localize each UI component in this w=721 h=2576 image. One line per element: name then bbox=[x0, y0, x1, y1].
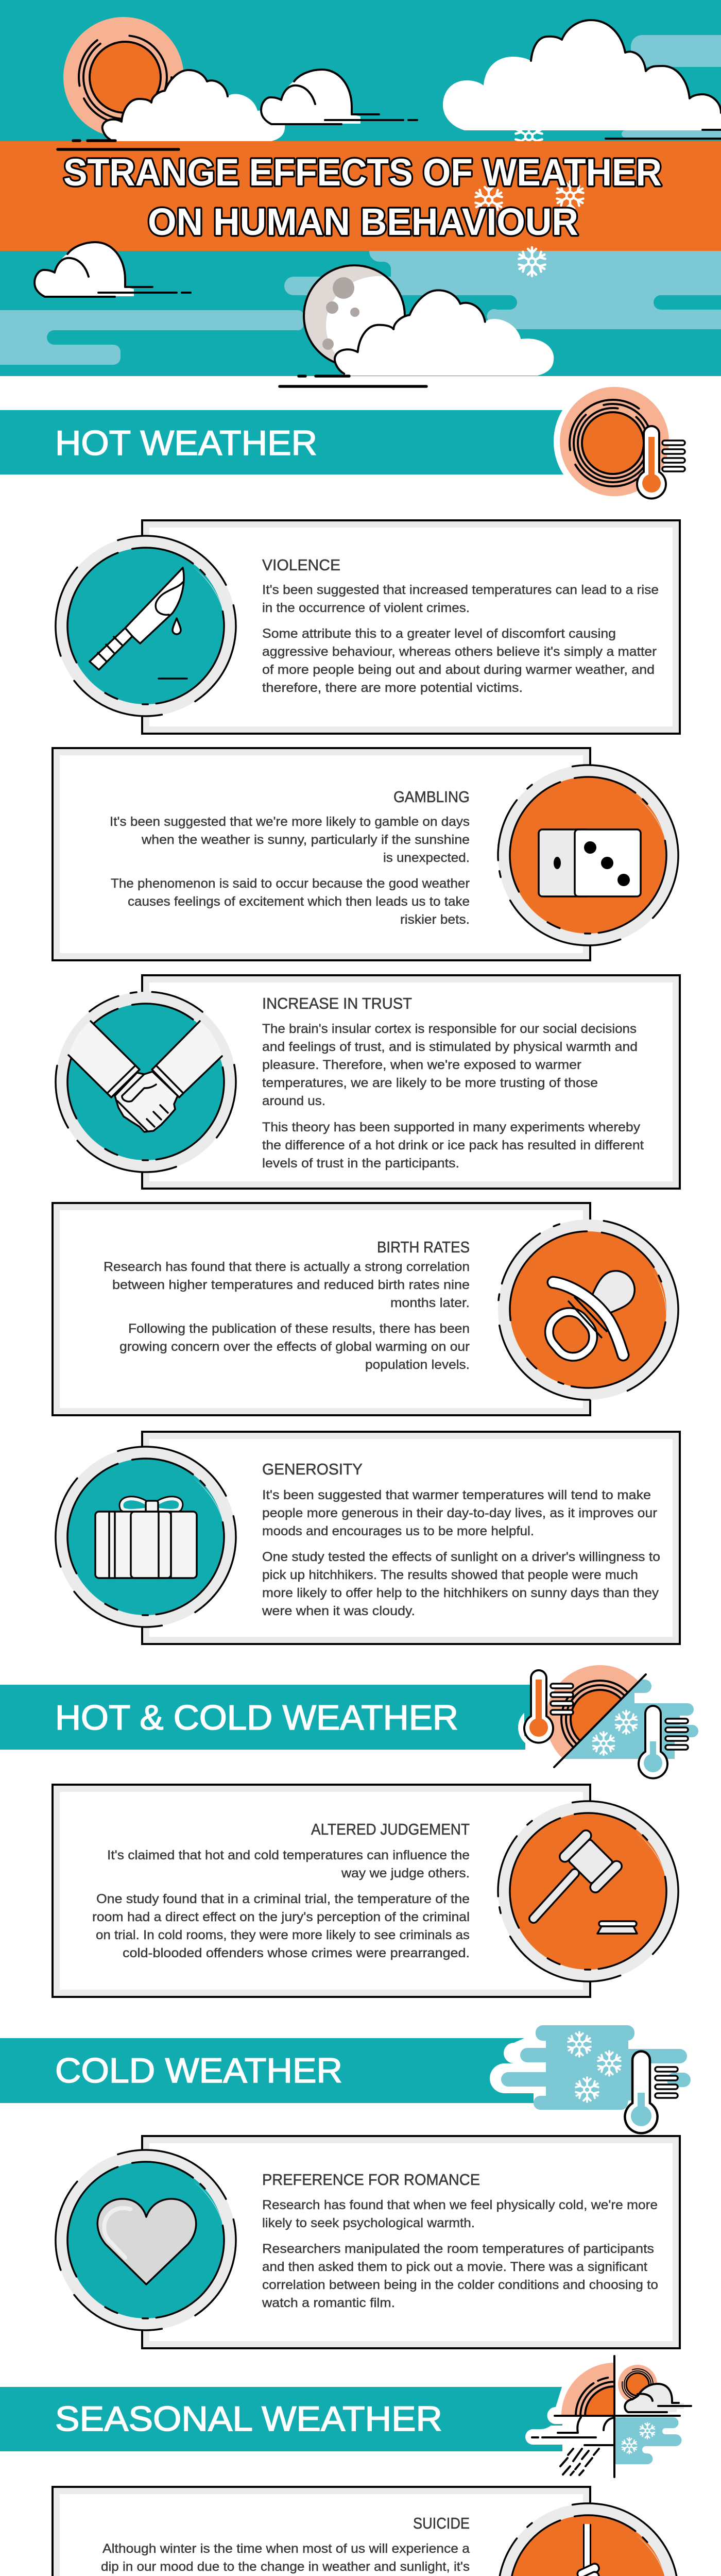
body text: It's claimed that hot and cold temperatures can influence the bbox=[107, 1848, 470, 1862]
body text: The brain's insular cortex is responsible for our social decisions bbox=[262, 1022, 637, 1036]
body text: correlation between being in the colder conditions and choosing to bbox=[262, 2278, 658, 2292]
body text: of more people being out and about during warmer weather, and bbox=[262, 663, 655, 677]
body text: The phenomenon is said to occur because the good weather bbox=[111, 876, 470, 891]
panel: birth rates bbox=[53, 1176, 721, 1444]
icon: sun thermometer bbox=[554, 381, 685, 502]
icon: snow and thermometer bbox=[490, 2025, 691, 2133]
panel: gambling bbox=[53, 748, 693, 960]
icon: snowflakes bbox=[474, 181, 585, 276]
heading text: HOT & COLD WEATHER bbox=[55, 1698, 458, 1737]
heading text: COLD WEATHER bbox=[55, 2051, 342, 2090]
body text bbox=[99, 2541, 470, 2576]
body text: around us. bbox=[262, 1094, 325, 1108]
body text: cold-blooded offenders whose crimes were prearranged. bbox=[123, 1946, 470, 1960]
icon: handshake bbox=[49, 986, 242, 1178]
icon: gavel bbox=[484, 1787, 693, 1996]
body text: when the weather is sunny, particularly if the sunshine bbox=[141, 833, 470, 847]
body text bbox=[262, 1488, 660, 1618]
body text: pick up hitchhikers. The results showed that people were much bbox=[262, 1568, 638, 1582]
icon: noose bbox=[484, 2489, 693, 2576]
body text: This theory has been supported in many experiments whereby bbox=[262, 1120, 641, 1134]
body text: Research has found that when we feel physically cold, we're more bbox=[262, 2198, 658, 2212]
body text: Research has found that there is actually a strong correlation bbox=[104, 1260, 470, 1274]
cloud over moon bbox=[335, 290, 554, 376]
section heading: hot weather bbox=[0, 381, 685, 502]
hero header bbox=[0, 0, 721, 386]
card frame bbox=[53, 1785, 590, 1997]
icon: sun bbox=[63, 17, 184, 138]
body text: population levels. bbox=[365, 1358, 470, 1372]
icon: bloody knife bbox=[32, 512, 260, 740]
body text bbox=[92, 1848, 470, 1960]
body text: on trial. In cold rooms, they were more likely to see criminals as bbox=[96, 1928, 470, 1942]
body text: It's been suggested that we're more likely to gamble on days bbox=[110, 815, 470, 829]
heading: GAMBLING bbox=[393, 788, 470, 806]
heading text: SEASONAL WEATHER bbox=[55, 2399, 442, 2438]
band bbox=[0, 1685, 530, 1750]
body text: room had a direct effect on the jury's perception of the criminal bbox=[92, 1910, 470, 1924]
panel: suicide bbox=[53, 2487, 693, 2576]
panel: generosity bbox=[32, 1423, 680, 1651]
cloud left lower bbox=[35, 242, 191, 297]
section heading: cold weather bbox=[0, 2025, 691, 2133]
heading: BIRTH RATES bbox=[377, 1238, 470, 1256]
body text: One study tested the effects of sunlight on a driver's willingness to bbox=[262, 1550, 660, 1564]
body text: and then asked them to pick out a movie. There was a significant bbox=[262, 2260, 647, 2274]
icon: gift bbox=[32, 1423, 260, 1651]
big cloud bbox=[443, 20, 721, 139]
body text: watch a romantic film. bbox=[262, 2296, 395, 2310]
body text: likely to seek psychological warmth. bbox=[262, 2216, 475, 2230]
body text: in the occurrence of violent crimes. bbox=[262, 601, 470, 615]
heading text: HOT WEATHER bbox=[55, 423, 317, 463]
heading: ALTERED JUDGEMENT bbox=[311, 1820, 470, 1838]
body text bbox=[104, 1260, 470, 1372]
body text: dip in our mood due to the change in weather and sunlight, it's bbox=[101, 2560, 470, 2574]
cloud base lines bbox=[58, 141, 179, 149]
cloud with sun bbox=[102, 70, 285, 141]
body text: It's been suggested that warmer temperatures will tend to make bbox=[262, 1488, 651, 1502]
body text: One study found that in a criminal trial, the temperature of the bbox=[96, 1892, 470, 1906]
orange title band bbox=[0, 141, 721, 251]
body text: riskier bets. bbox=[400, 912, 470, 927]
body text: therefore, there are more potential victims. bbox=[262, 681, 523, 695]
body text: Researchers manipulated the room temperatures of participants bbox=[262, 2242, 654, 2256]
hero background bbox=[0, 0, 721, 376]
panel: violence bbox=[32, 512, 680, 740]
title bbox=[63, 151, 662, 243]
body text: levels of trust in the participants. bbox=[262, 1156, 459, 1171]
body text: is unexpected. bbox=[383, 851, 470, 865]
icon: moon bbox=[303, 264, 406, 364]
band bbox=[0, 2387, 562, 2451]
body text bbox=[262, 1022, 644, 1171]
band bbox=[0, 410, 592, 474]
body text: temperatures, we are likely to be more trusting of those bbox=[262, 1076, 598, 1090]
body text: Some attribute this to a greater level of discomfort causing bbox=[262, 626, 616, 641]
title: ON HUMAN BEHAVIOUR bbox=[148, 200, 578, 243]
body text bbox=[262, 2198, 658, 2310]
panel: altered judgement bbox=[53, 1785, 693, 1997]
winter quadrant bbox=[615, 2417, 682, 2464]
body text: moods and encourages us to be more helpful. bbox=[262, 1524, 534, 1538]
body text: Following the publication of these results, there has been bbox=[128, 1321, 470, 1336]
body text: It's been suggested that increased temperatures can lead to a rise bbox=[262, 583, 659, 597]
card frame bbox=[142, 520, 680, 734]
body text: Although winter is the time when most of us will experience a bbox=[102, 2541, 470, 2556]
card frame bbox=[142, 1432, 680, 1644]
body text: were when it was cloudy. bbox=[262, 1604, 415, 1618]
body text: months later. bbox=[390, 1296, 470, 1310]
icon: snowflake behind cloud bbox=[514, 122, 543, 151]
body text: way we judge others. bbox=[341, 1866, 470, 1880]
body text: people more generous in their day-to-day lives, as it improves our bbox=[262, 1506, 657, 1520]
icon: four seasons bbox=[525, 2356, 691, 2477]
small cloud bbox=[261, 70, 417, 124]
heading: SUICIDE bbox=[413, 2514, 470, 2532]
body text: aggressive behaviour, whereas others believe it's simply a matter bbox=[262, 645, 657, 659]
band bbox=[0, 2038, 546, 2103]
card frame bbox=[53, 1203, 590, 1415]
heading: PREFERENCE FOR ROMANCE bbox=[262, 2171, 480, 2189]
card frame bbox=[53, 748, 590, 960]
heading: INCREASE IN TRUST bbox=[262, 994, 412, 1012]
body text: and feelings of trust, and is stimulated by physical warmth and bbox=[262, 1040, 638, 1054]
icon: heart bbox=[32, 2126, 260, 2354]
icon: pacifier bbox=[454, 1176, 721, 1444]
icon: dice bbox=[484, 751, 693, 960]
section heading: seasonal weather bbox=[0, 2356, 691, 2477]
body text: pleasure. Therefore, when we're exposed to warmer bbox=[262, 1058, 581, 1072]
panel: preference for romance bbox=[32, 2126, 680, 2354]
body text: the difference of a hot drink or ice pack has resulted in different bbox=[262, 1138, 644, 1153]
icon: half sun half snow with thermometers bbox=[518, 1665, 698, 1778]
title: STRANGE EFFECTS OF WEATHER bbox=[63, 151, 662, 194]
heading: VIOLENCE bbox=[262, 556, 340, 574]
card frame bbox=[142, 975, 680, 1189]
body text: causes feelings of excitement which then leads us to take bbox=[128, 894, 470, 909]
panel: increase in trust bbox=[49, 975, 680, 1189]
card frame bbox=[53, 2487, 590, 2576]
body text bbox=[262, 583, 659, 695]
moon cloud lines bbox=[280, 376, 426, 386]
body text bbox=[110, 815, 470, 927]
section heading: hot and cold weather bbox=[0, 1665, 698, 1778]
body text: between higher temperatures and reduced birth rates nine bbox=[112, 1278, 470, 1292]
body text: more likely to offer help to the hitchhikers on sunny days than they bbox=[262, 1586, 659, 1600]
hero light stripes bbox=[0, 35, 721, 365]
heading: GENEROSITY bbox=[262, 1460, 363, 1478]
card frame bbox=[142, 2136, 680, 2348]
body text: growing concern over the effects of global warming on our bbox=[119, 1340, 470, 1354]
